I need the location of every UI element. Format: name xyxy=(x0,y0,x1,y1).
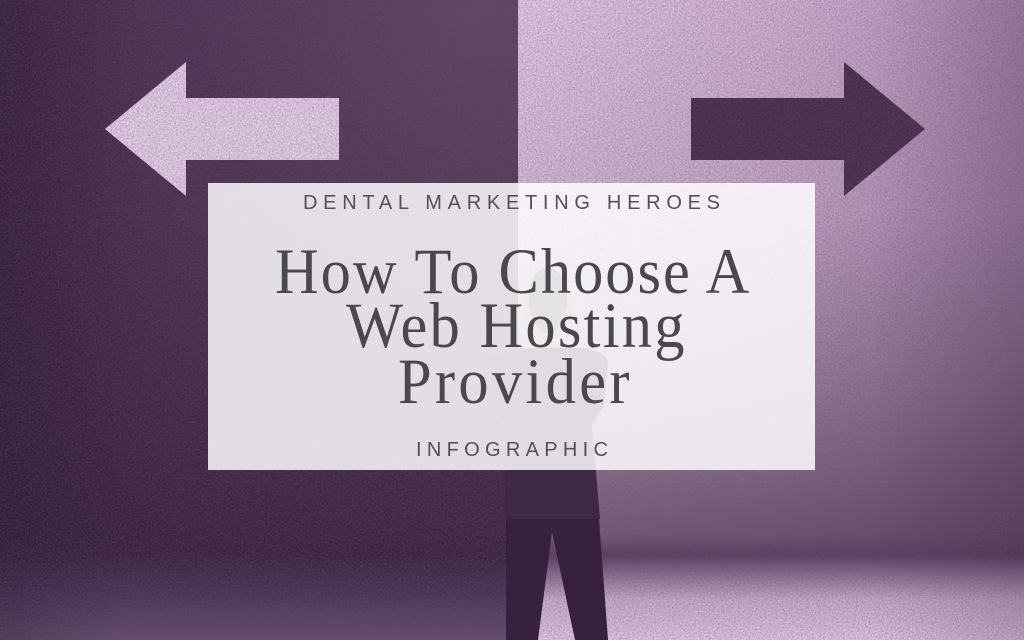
person standing with back to viewer xyxy=(490,267,608,640)
infographic label: INFOGRAPHIC xyxy=(416,439,608,461)
title line 3: Provider xyxy=(398,345,630,417)
arrow: right pointing, dark xyxy=(691,62,925,196)
jacket xyxy=(490,348,608,519)
title line 2: Web Hosting xyxy=(346,289,685,361)
brand name heading: DENTAL MARKETING HEROES xyxy=(303,192,720,214)
arrow: left pointing, light xyxy=(105,62,339,196)
title block xyxy=(275,235,749,417)
trousers xyxy=(506,519,608,640)
translucent title panel xyxy=(208,183,815,470)
head xyxy=(523,267,573,349)
title line 1: How To Choose A xyxy=(275,235,749,307)
